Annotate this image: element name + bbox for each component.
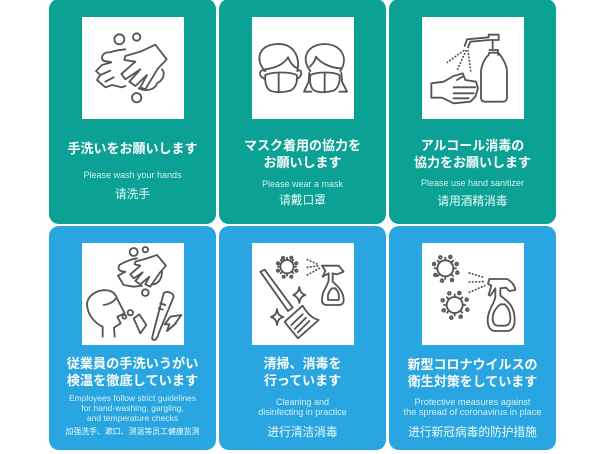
English text bbox=[404, 396, 542, 417]
English text: Please wear a mask bbox=[262, 179, 343, 189]
panel: cleaning bbox=[219, 226, 386, 450]
English text: Please wash your hands bbox=[83, 170, 182, 180]
heading bbox=[244, 138, 361, 170]
Chinese text: 请用酒精消毒 bbox=[437, 195, 508, 208]
heading: 行っています bbox=[264, 372, 341, 388]
icon: washing, gargling and thermometer bbox=[82, 243, 184, 345]
heading: 清掃、消毒を bbox=[263, 356, 342, 371]
heading: 新型コロナウイルスの bbox=[407, 357, 538, 372]
panel: coronavirus protection bbox=[389, 226, 556, 450]
English text: Please use hand sanitizer bbox=[421, 178, 524, 188]
Chinese text: 加强洗手、漱口、测温等员工健康监测 bbox=[65, 427, 200, 436]
heading bbox=[414, 138, 531, 170]
heading: お願いします bbox=[263, 154, 342, 170]
Chinese text: 进行清洁消毒 bbox=[267, 426, 338, 439]
English text: the spread of coronavirus in place bbox=[404, 407, 541, 417]
heading: マスク着用の協力を bbox=[244, 138, 361, 152]
heading: 衛生対策をしています bbox=[408, 374, 537, 389]
heading: アルコール消毒の bbox=[421, 138, 524, 152]
panel: wash hands bbox=[49, 0, 216, 224]
panel: wear a mask bbox=[219, 0, 386, 224]
Chinese text: 进行新冠病毒的防护措施 bbox=[408, 426, 537, 439]
heading: 協力をお願いします bbox=[414, 154, 531, 170]
English text bbox=[258, 396, 347, 417]
panel: employee hygiene bbox=[49, 226, 216, 450]
icon: broom, virus, spray bbox=[252, 243, 354, 345]
icon: washing hands bbox=[82, 17, 184, 119]
English text: Protective measures against bbox=[415, 396, 530, 406]
heading bbox=[263, 356, 342, 388]
English text bbox=[69, 393, 196, 423]
English text: disinfecting in practice bbox=[258, 407, 347, 417]
English text: Cleaning and bbox=[276, 396, 329, 406]
icon: sanitizer bottle and hands bbox=[422, 17, 524, 119]
heading: 従業員の手洗いうがい bbox=[67, 356, 198, 370]
panel: hand sanitizer bbox=[389, 0, 556, 224]
English text: for hand-washing, gargling, bbox=[81, 403, 184, 413]
icon: two people wearing masks bbox=[252, 17, 354, 119]
heading: 検温を徹底しています bbox=[67, 372, 198, 388]
heading bbox=[66, 356, 198, 388]
Chinese text: 请戴口罩 bbox=[279, 194, 326, 207]
heading bbox=[407, 357, 538, 389]
Chinese text: 请洗手 bbox=[115, 188, 150, 201]
icon: viruses and spray bottle bbox=[422, 243, 524, 345]
English text: Employees follow strict guidelines bbox=[69, 393, 196, 403]
heading: 手洗いをお願いします bbox=[67, 141, 198, 156]
English text: and temperature checks bbox=[87, 413, 178, 423]
